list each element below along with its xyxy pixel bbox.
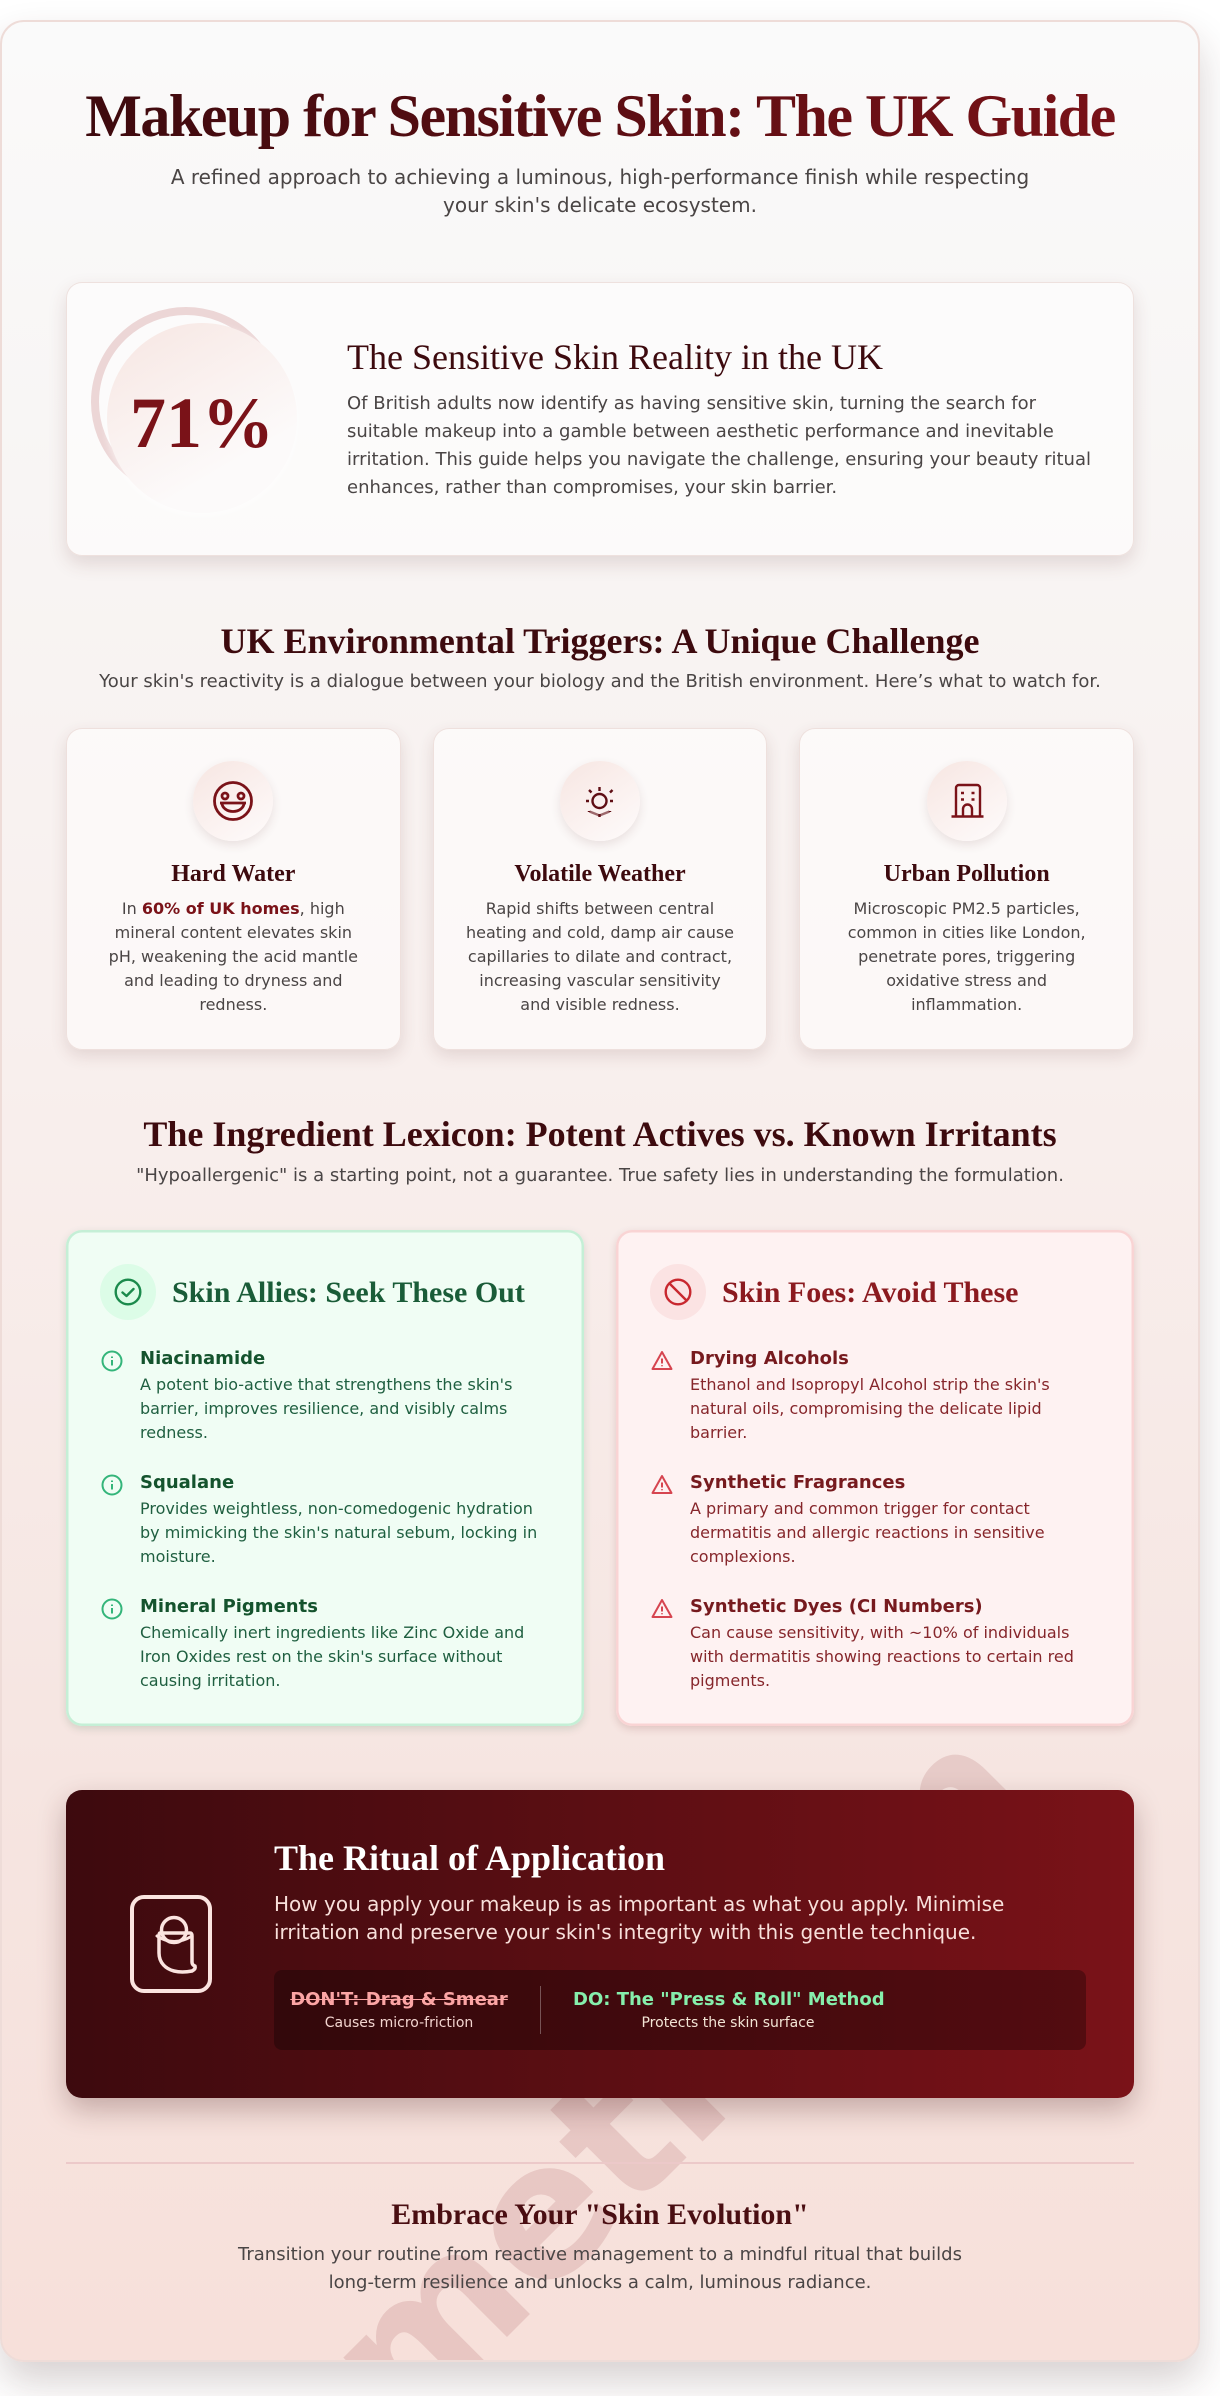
- name: Niacinamide: [140, 1348, 265, 1368]
- item: synthetic dyes: [652, 1596, 1074, 1690]
- icon: makeup sponge: [130, 1895, 212, 1993]
- icon: check circle: [100, 1264, 156, 1320]
- icon: warning: [652, 1351, 672, 1370]
- don't note: Causes micro-friction: [325, 2015, 473, 2031]
- description: Chemically inert ingredients like Zinc Oxide and: [140, 1622, 524, 1642]
- description: pigments.: [690, 1670, 770, 1690]
- description: [140, 1622, 524, 1690]
- panel: skin foes: [616, 1230, 1134, 1726]
- description: causing irritation.: [140, 1670, 280, 1690]
- text: lexicon intro: "Hypoallergenic" is a starting point, not a guarantee. True safety lies in understanding the formulation.: [136, 1165, 1064, 1186]
- card text: and visible redness.: [520, 995, 680, 1014]
- card text: inflammation.: [911, 995, 1022, 1014]
- stat description: Of British adults now identify as having sensitive skin, turning the search for: [347, 393, 1036, 414]
- name: Synthetic Fragrances: [690, 1472, 905, 1492]
- ritual text: [274, 1892, 1004, 1944]
- stat ring: [91, 307, 281, 497]
- heading: ingredient lexicon: The Ingredient Lexicon: Potent Actives vs. Known Irritants: [143, 1114, 1057, 1154]
- footer text: long-term resilience and unlocks a calm, luminous radiance.: [329, 2272, 871, 2293]
- description: barrier.: [690, 1422, 747, 1442]
- name: Synthetic Dyes (CI Numbers): [690, 1596, 983, 1616]
- card text: capillaries to dilate and contract,: [468, 947, 732, 966]
- description: barrier, improves resilience, and visibly calms: [140, 1398, 507, 1418]
- ritual text: irritation and preserve your skin's integrity with this gentle technique.: [274, 1920, 976, 1944]
- panel: volatile weather: [433, 728, 767, 1050]
- description: redness.: [140, 1422, 208, 1442]
- panel: skin allies: [66, 1230, 584, 1726]
- card text: oxidative stress and: [886, 971, 1047, 990]
- footer rule: [66, 2162, 1134, 2164]
- title: Makeup for Sensitive Skin: The UK Guide: [85, 83, 1115, 149]
- description: Can cause sensitivity, with ~10% of individuals: [690, 1622, 1069, 1642]
- card text: In 60% of UK homes, high: [122, 899, 345, 918]
- card text: increasing vascular sensitivity: [479, 971, 721, 990]
- icon: prohibited: [650, 1264, 706, 1320]
- name: Drying Alcohols: [690, 1348, 849, 1368]
- description: natural oils, compromising the delicate lipid: [690, 1398, 1042, 1418]
- stat circle with 71%: 71%: [130, 383, 274, 463]
- description: Provides weightless, non-comedogenic hydration: [140, 1498, 533, 1518]
- description: [140, 1498, 537, 1566]
- item: mineral pigments: [102, 1596, 524, 1690]
- icon: warning: [652, 1599, 672, 1618]
- description: Ethanol and Isopropyl Alcohol strip the skin's: [690, 1374, 1050, 1394]
- item: niacinamide: [102, 1348, 512, 1442]
- footer text: [238, 2244, 962, 2293]
- description: A primary and common trigger for contact: [690, 1498, 1030, 1518]
- name: Squalane: [140, 1472, 234, 1492]
- card title: Hard Water: [171, 861, 295, 887]
- stat heading: The Sensitive Skin Reality in the UK: [347, 337, 883, 377]
- description: by mimicking the skin's natural sebum, locking in: [140, 1522, 537, 1542]
- divider: [540, 1986, 541, 2034]
- subtitle: [171, 164, 1029, 216]
- card text: common in cities like London,: [848, 923, 1086, 942]
- stat description: irritation. This guide helps you navigate the challenge, ensuring your beauty ritual: [347, 449, 1091, 470]
- card text: Rapid shifts between central: [486, 899, 714, 918]
- card title: Urban Pollution: [884, 861, 1050, 887]
- card text: heating and cold, damp air cause: [466, 923, 734, 942]
- card text: [466, 899, 734, 1014]
- panel: ritual of application: [66, 1790, 1134, 2098]
- item: squalane: [102, 1472, 537, 1566]
- icon: warning: [652, 1475, 672, 1494]
- description: with dermatitis showing reactions to certain red: [690, 1646, 1074, 1666]
- description: Iron Oxides rest on the skin's surface without: [140, 1646, 502, 1666]
- card text: [848, 899, 1086, 1014]
- card text: redness.: [199, 995, 267, 1014]
- subtitle: your skin's delicate ecosystem.: [443, 192, 757, 216]
- panel: urban pollution: [799, 728, 1134, 1050]
- icon: info: [102, 1598, 122, 1620]
- description: [140, 1374, 512, 1442]
- card text: [109, 899, 358, 1014]
- card text: and leading to dryness and: [124, 971, 343, 990]
- icon: info: [102, 1474, 122, 1496]
- ritual heading: The Ritual of Application: [274, 1838, 665, 1878]
- name: Mineral Pigments: [140, 1596, 318, 1616]
- foes heading: Skin Foes: Avoid These: [722, 1276, 1018, 1309]
- panel: sensitive skin stat: [66, 282, 1134, 556]
- card text: pH, weakening the acid mantle: [109, 947, 358, 966]
- stat circle with 71%: [107, 323, 297, 513]
- icon: sun: [560, 761, 640, 841]
- description: A potent bio-active that strengthens the skin's: [140, 1374, 512, 1394]
- description: complexions.: [690, 1546, 796, 1566]
- description: [690, 1498, 1045, 1566]
- do label: DO: The "Press & Roll" Method: [573, 1989, 885, 2010]
- description: dermatitis and allergic reactions in sensitive: [690, 1522, 1045, 1542]
- card title: Volatile Weather: [514, 861, 686, 887]
- ritual text: How you apply your makeup is as important as what you apply. Minimise: [274, 1892, 1004, 1916]
- panel: hard water: [66, 728, 401, 1050]
- icon: face: [193, 761, 273, 841]
- card text: mineral content elevates skin: [115, 923, 352, 942]
- do block: [573, 1989, 885, 2031]
- don't label: DON'T: Drag & Smear: [290, 1989, 508, 2010]
- description: [690, 1374, 1050, 1442]
- description: moisture.: [140, 1546, 216, 1566]
- card text: penetrate pores, triggering: [858, 947, 1075, 966]
- footer heading: Embrace Your "Skin Evolution": [391, 2198, 809, 2231]
- stat description: enhances, rather than compromises, your skin barrier.: [347, 477, 837, 498]
- technique box: [274, 1970, 1086, 2050]
- allies heading: Skin Allies: Seek These Out: [172, 1276, 525, 1309]
- stat description: [347, 393, 1091, 498]
- text: triggers intro: Your skin's reactivity is a dialogue between your biology and the British environment. Here’s what to watch for.: [99, 671, 1101, 692]
- icon: info: [102, 1350, 122, 1372]
- heading: environmental triggers: UK Environmental Triggers: A Unique Challenge: [220, 620, 980, 660]
- icon: building: [927, 761, 1007, 841]
- item: drying alcohols: [652, 1348, 1050, 1442]
- card text: Microscopic PM2.5 particles,: [854, 899, 1080, 918]
- footer text: Transition your routine from reactive management to a mindful ritual that builds: [238, 2244, 962, 2265]
- don't block: [290, 1989, 508, 2031]
- subtitle: A refined approach to achieving a luminous, high-performance finish while respecting: [171, 164, 1029, 188]
- stat description: suitable makeup into a gamble between aesthetic performance and inevitable: [347, 421, 1054, 442]
- item: synthetic fragrances: [652, 1472, 1045, 1566]
- description: [690, 1622, 1074, 1690]
- do note: Protects the skin surface: [641, 2015, 815, 2031]
